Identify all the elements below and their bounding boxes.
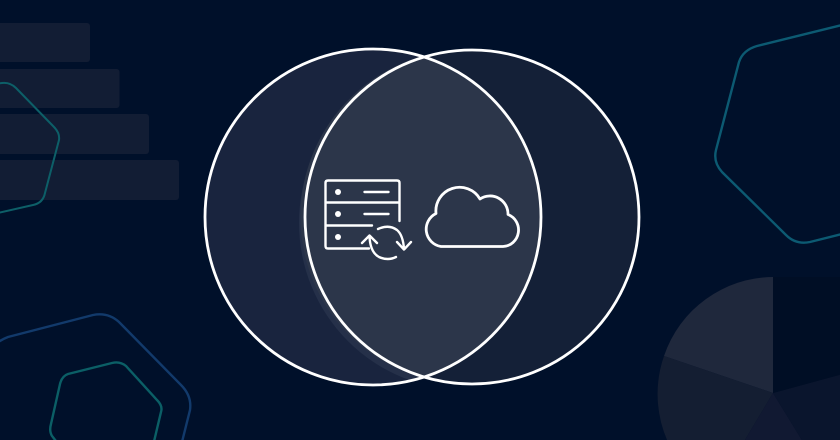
pie slice: top right <box>773 277 840 393</box>
server indicator lines <box>364 192 388 214</box>
intersection fill <box>300 56 541 378</box>
server dividers <box>326 202 399 226</box>
bottom-left teal hexagon outline <box>50 362 162 440</box>
right circle fill <box>305 50 639 384</box>
left circle fill <box>205 49 541 385</box>
left teal hexagon outline <box>0 83 59 217</box>
Venn diagram <box>205 49 639 390</box>
pie slice: darkest <box>773 372 840 440</box>
icon: cloud <box>426 187 519 246</box>
pie slice: dark <box>739 393 808 440</box>
sync arrows <box>378 227 411 250</box>
background pie chart <box>658 277 840 440</box>
bottom-left blue hexagon outline <box>0 314 190 440</box>
icon: server rack with sync arrows <box>326 180 411 259</box>
right circle outline <box>305 50 639 384</box>
pie slice: mid <box>658 356 773 440</box>
intersection shadow halo <box>299 191 418 380</box>
pie slice: light <box>664 277 773 393</box>
server outline <box>326 180 400 248</box>
left circle outline <box>205 49 541 385</box>
server indicator dots <box>335 189 341 240</box>
background bar chart <box>0 23 179 200</box>
top-right teal hexagon outline <box>715 23 840 243</box>
